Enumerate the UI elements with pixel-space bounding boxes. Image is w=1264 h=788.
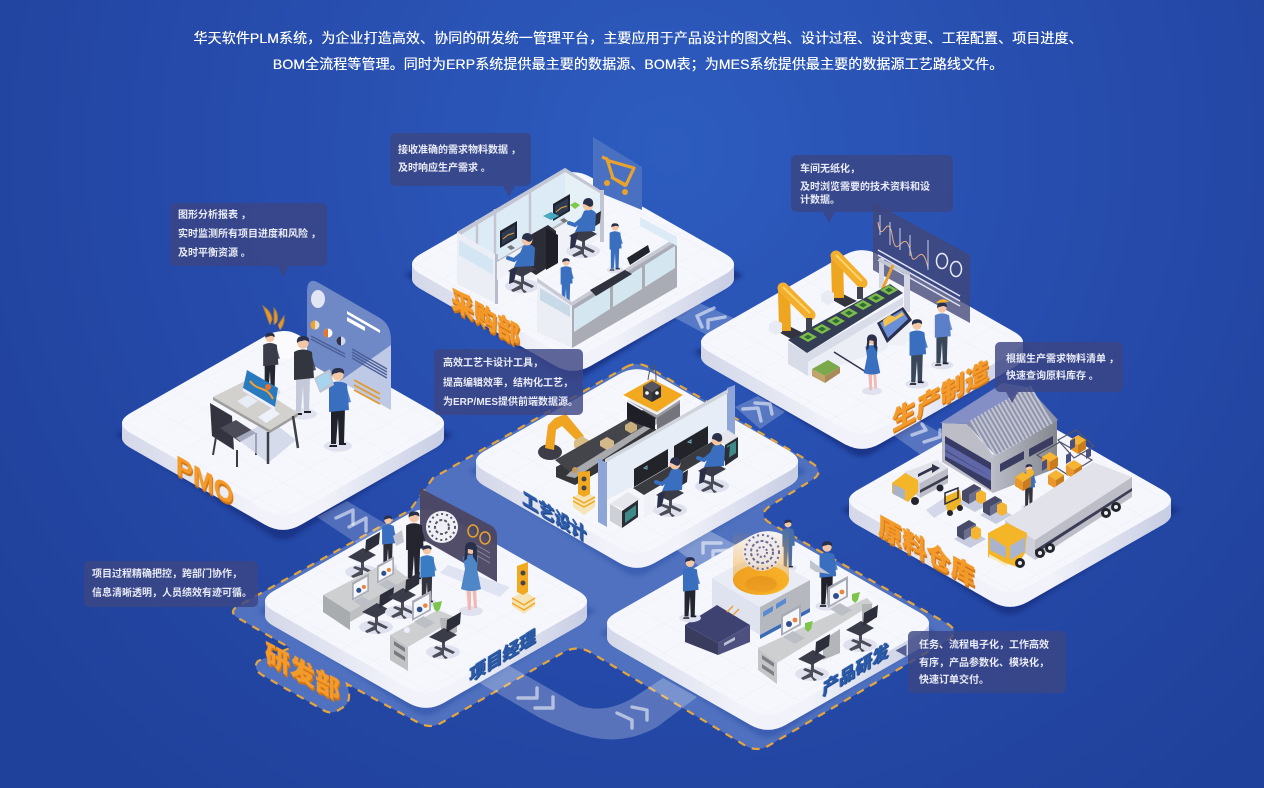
small truck [892,460,948,505]
callout: product development: 快速订单交付。 [919,675,989,686]
callout: product development [908,631,1066,693]
chair right [426,612,461,659]
scene: raw material warehouse [892,383,1132,568]
platform: manufacturing [701,250,1023,449]
scene: PMO [210,281,391,467]
big truck [988,462,1132,568]
callout: manufacturing: 及时浏览需要的技术资料和设 [800,182,930,193]
machine tower [623,366,683,445]
back left wall [457,168,565,285]
small control boxes [769,290,834,335]
scene: project manager [323,488,535,671]
dark control unit [685,605,750,655]
data screen [873,202,970,323]
cardboard box [812,360,840,383]
scene: manufacturing [769,202,970,395]
callout: PMO: 实时监测所有项目进度和风险 ， [178,229,321,240]
connector: PMO to project manager [317,501,396,549]
back right wall [565,168,604,242]
pillar [512,562,535,614]
label: purchasing: 采购部 [451,284,520,352]
person behind machine [779,520,797,571]
callout: raw material warehouse: 快速查询原料库存 。 [1006,371,1099,382]
seated workers [505,233,540,293]
callout: process design [434,349,583,415]
callout: purchasing [390,133,531,186]
robot arm 2 [829,255,863,307]
touch console [877,307,912,346]
connector: manufacturing to warehouse [893,420,948,458]
callout: manufacturing [791,155,953,212]
woman at screen [459,542,483,616]
engineer left [679,557,701,622]
callout: PMO [170,203,327,266]
test machine [712,553,810,639]
intro text: BOM全流程等管理。同时为ERP系统提供最主要的数据源、BOM表；为MES系统提供最主要的数据源工艺路线文件。 [273,56,1003,72]
label: project manager: 项目经理 [469,625,536,686]
scene: product development [679,520,878,684]
desks with monitors [497,194,600,282]
callout: project manager [84,561,258,607]
operator desks [633,426,725,518]
operator [905,319,929,389]
callout: purchasing: 及时响应生产需求 。 [398,163,491,174]
callout: PMO: 及时平衡资源 。 [178,248,251,259]
platform: product development [607,531,929,730]
callout: raw material warehouse: 根据生产需求物料清单 ， [1006,354,1119,365]
office desk [323,556,408,630]
server cabinet right [713,430,738,466]
platform: project manager [265,509,587,708]
connector: product to process [677,530,740,568]
platform: purchasing [412,172,734,371]
presenter [417,545,437,607]
chairs [795,634,830,681]
scene: process design [538,366,738,528]
box carrier worker [1015,464,1037,510]
person with tablet [259,333,281,396]
zone platform shadows [258,381,938,738]
intro text [193,30,1083,72]
chairs [359,587,394,634]
worker with helmet [931,299,953,369]
measuring stick [834,352,866,372]
racks [1037,430,1094,489]
label: R&D department: 研发部 [265,639,340,707]
front workers [558,223,623,308]
callout: manufacturing: 计数据。 [800,195,840,206]
display wall [420,488,497,582]
callout: raw material warehouse [995,342,1123,392]
person with laptop [314,368,352,452]
label: raw material warehouse: 原料仓库 [878,511,975,593]
callout: product development: 有序，产品参数化、模块化， [919,658,1049,669]
hologram model [733,530,789,593]
label: product development: 产品研发 [822,639,889,700]
warehouse building [940,383,1058,493]
desk [213,380,298,464]
connector: process design to manufacturing [735,396,785,429]
seated operators [653,457,688,517]
base of the screen [440,565,510,597]
scene: purchasing [457,137,677,348]
chair [210,403,256,467]
callout: purchasing: 接收准确的需求物料数据 ， [398,145,521,156]
person in grey trousers [289,336,317,420]
callout: manufacturing: 车间无纸化， [800,164,860,175]
desktop monitor [237,370,280,423]
platform shadows [115,185,1180,614]
callout: project manager: 信息清晰透明，人员绩效有迹可循。 [92,588,252,599]
callout: process design: 高效工艺卡设计工具， [443,358,543,369]
gantry [879,258,910,312]
pallets [959,484,991,512]
callout: PMO: 图形分析报表 ， [178,210,251,221]
callout: project manager: 项目过程精确把控，跨部门协作， [92,569,242,580]
dashed zone: R&D department [233,364,954,749]
intro text: 华天软件PLM系统，为企业打造高效、协同的研发统一管理平台，主要应用于产品设计的图文档、设计过程、设计变更、工程配置、项目进度、 [193,30,1083,46]
holographic dashboard [307,281,391,410]
platform: process design [476,369,798,568]
front partition [537,217,677,348]
connector: purchasing to manufacturing [673,302,740,338]
glass partition [598,385,735,527]
callout: product development: 任务、流程电子化，工作高效 [919,640,1049,651]
left side wall [457,232,498,304]
conveyor [555,410,657,485]
front desk [390,590,457,671]
callout: process design: 为ERP/MES提供前端数据源。 [443,397,578,408]
robot arm 1 [775,287,812,339]
woman [862,334,882,395]
robot arm [538,414,590,460]
forklift [926,488,963,518]
platform: PMO [122,331,444,530]
label: manufacturing: 生产制造 [892,355,990,437]
pedestal [267,331,303,359]
server cabinet left [610,492,640,528]
standing team [379,511,426,585]
label: PMO: PMO [176,449,233,513]
conveyor [788,284,903,376]
label: process design: 工艺设计 [522,488,587,545]
platform: raw material warehouse [849,408,1171,607]
long desk [758,576,873,684]
chair back row [345,532,380,579]
plant [263,306,284,330]
engineer with laptop [810,541,839,611]
connector: curved project to product [478,665,697,739]
callout: process design: 提高编辑效率，结构化工艺， [443,378,573,389]
cart panel [593,137,642,210]
orange pillar [573,471,595,515]
